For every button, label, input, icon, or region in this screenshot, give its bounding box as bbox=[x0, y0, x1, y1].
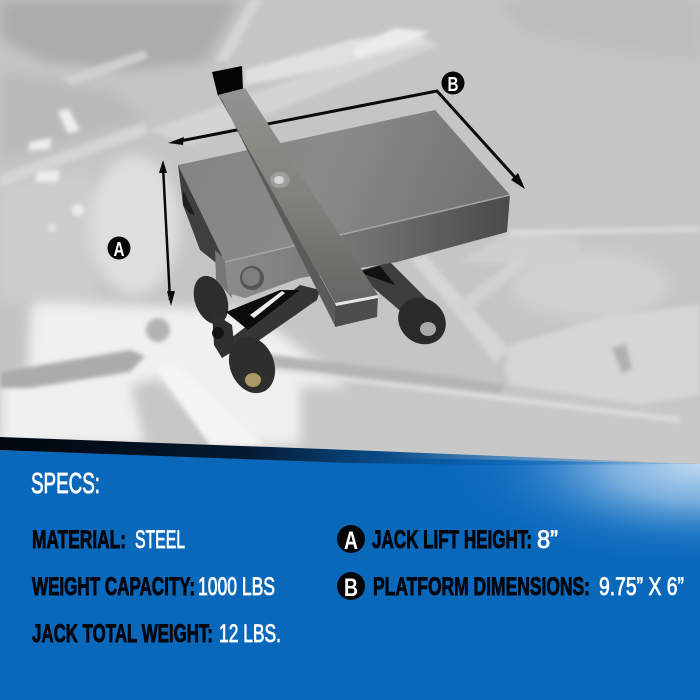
cross bar bbox=[212, 66, 378, 327]
blue specs panel bbox=[0, 437, 700, 700]
dimension arrow A bbox=[159, 160, 175, 306]
bar bolt bbox=[270, 172, 290, 188]
badge B: B bbox=[448, 74, 458, 96]
spec: weight capacity: WEIGHT CAPACITY: bbox=[32, 573, 195, 601]
side plate under platform bbox=[178, 165, 228, 293]
front left wheel bbox=[221, 330, 283, 400]
spec B: platform dimensions: PLATFORM DIMENSIONS: bbox=[373, 573, 590, 601]
platform front bbox=[225, 195, 510, 298]
platform top bbox=[178, 110, 510, 262]
scissor legs left bbox=[222, 285, 320, 355]
pin on side bbox=[240, 266, 264, 290]
back wheel left bbox=[187, 271, 235, 329]
spec A: jack lift height: A bbox=[344, 527, 358, 555]
badge A: A bbox=[114, 239, 124, 261]
scissor jack product bbox=[178, 66, 510, 400]
spec B: platform dimensions: B bbox=[344, 574, 358, 602]
spec A: jack lift height bbox=[337, 525, 558, 555]
spec: jack total weight: 12 LBS. bbox=[219, 620, 281, 648]
background photo: workshop in greyscale bbox=[0, 0, 700, 475]
panel top stripe bbox=[0, 437, 700, 465]
dimension arrow B bbox=[168, 91, 525, 189]
spec: jack total weight: JACK TOTAL WEIGHT: bbox=[32, 620, 213, 648]
spec: weight capacity: 1000 LBS bbox=[198, 573, 275, 601]
right wheel bbox=[389, 288, 455, 354]
badge A bbox=[108, 236, 130, 261]
spec A: jack lift height: JACK LIFT HEIGHT: bbox=[372, 526, 532, 554]
specs heading: SPECS: bbox=[31, 468, 100, 500]
back right leg bbox=[355, 262, 428, 315]
badge B bbox=[442, 72, 464, 96]
spec: material: STEEL bbox=[135, 526, 185, 554]
spec A: jack lift height: 8” bbox=[537, 526, 558, 554]
spec: material: MATERIAL: bbox=[32, 526, 126, 554]
